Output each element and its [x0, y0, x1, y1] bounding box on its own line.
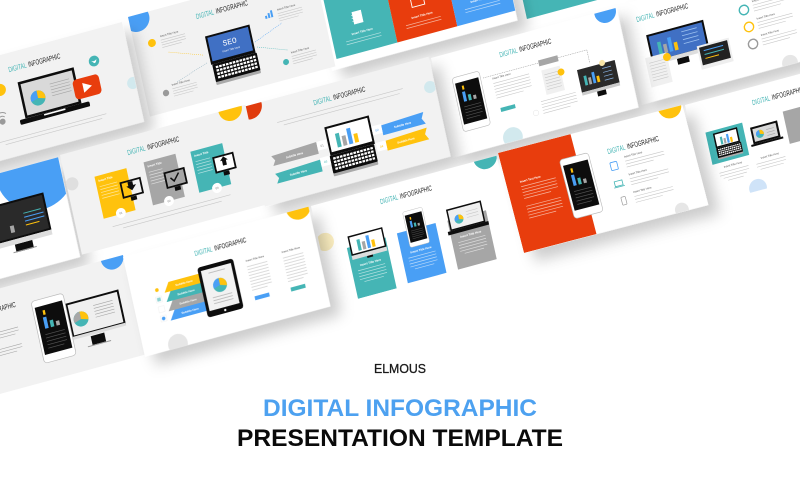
- laptop with SEO screen: [205, 24, 261, 85]
- list item gray: Insert Title Here: [760, 28, 780, 37]
- caption 2: Insert Title Here: [760, 151, 780, 160]
- callout bottom right: Insert Title Here: [290, 46, 310, 55]
- decoration: pale yellow circle: [314, 231, 336, 253]
- callout bottom: Insert Title Here: [171, 78, 191, 87]
- title: [196, 0, 248, 19]
- decoration: pale teal circle: [423, 80, 437, 94]
- decoration: pale teal circle: [503, 127, 523, 144]
- monitor: [577, 60, 620, 96]
- title: [312, 84, 367, 107]
- slide: monitor with checklist: [620, 0, 800, 111]
- slide: laptop with ribbons: [234, 45, 451, 208]
- icon: video play: [72, 74, 102, 100]
- text block lower: [531, 92, 578, 116]
- icon: wifi: [0, 112, 6, 125]
- ribbon: blue: [371, 112, 426, 138]
- panel: blue column: [438, 0, 515, 26]
- icon: yellow circle: [0, 84, 6, 96]
- text block: [492, 73, 532, 112]
- panel: blue column: Insert Title Here: [410, 245, 432, 254]
- decoration: yellow circle: [283, 192, 313, 223]
- ribbon stack: Subtitle Here: [175, 279, 193, 287]
- paragraph: [113, 195, 231, 231]
- slide: three colour columns: [310, 0, 517, 71]
- brand name: ELMOUS: [374, 362, 426, 376]
- callout bottom: [162, 80, 198, 96]
- list item teal: [738, 0, 784, 16]
- text column 1: Insert Title Here: [245, 254, 265, 263]
- callout top right: Insert Title Here: [276, 3, 296, 12]
- slide: teal panel top right: [500, 0, 708, 31]
- decoration: yellow circle: [655, 92, 684, 121]
- monitor with pie: [65, 289, 129, 351]
- decoration: gray circle: [782, 55, 798, 66]
- panel: teal laptop: [705, 123, 749, 165]
- title: INFOGRAPHIC: [518, 36, 552, 54]
- slide: SEO laptop: [121, 0, 335, 118]
- text column 2: [281, 245, 311, 292]
- title: [193, 235, 247, 258]
- text block: [0, 327, 23, 361]
- ribbon: teal: Subtitle Here: [289, 168, 308, 177]
- ribbon stack: [163, 273, 208, 321]
- tablet: [197, 258, 244, 318]
- decoration: pale teal circle: [127, 77, 136, 89]
- icon: phone: [559, 153, 603, 219]
- ribbon: gray: Subtitle Here: [285, 151, 304, 159]
- paragraph: [277, 89, 404, 126]
- heading line 2: PRESENTATION TEMPLATE: [237, 425, 563, 452]
- text block: Insert Title Here: [492, 72, 511, 81]
- slide: orange panel with phone: [494, 91, 710, 258]
- slide: three device columns: [305, 142, 519, 306]
- monitor: [0, 192, 54, 259]
- title: DIGITAL: [126, 144, 146, 157]
- ribbon: gray: [271, 139, 328, 166]
- title: DIGITAL: [193, 244, 213, 258]
- laptop with SEO screen: SEO: [222, 36, 238, 49]
- header bar and document: [538, 55, 565, 95]
- panel: teal column: Insert Title Here: [360, 257, 382, 267]
- title: DIGITAL: [606, 143, 626, 156]
- slide: blue shape and monitor: [0, 120, 94, 307]
- document: [645, 52, 672, 88]
- panel: gray column: Insert Title Here: [460, 229, 482, 239]
- list item: tablet: Insert Title Here: [624, 150, 643, 159]
- title: DIGITAL: [379, 193, 399, 206]
- small laptop: [697, 38, 734, 70]
- panel: orange column: Insert Title Here: [411, 10, 433, 20]
- orange panel text: [519, 171, 564, 218]
- decoration: gray circle: [673, 201, 690, 218]
- title: DIGITAL: [635, 10, 655, 24]
- ribbon: yellow: [375, 128, 429, 153]
- list item gray: [748, 30, 797, 50]
- slide: phone and monitor with pie: [0, 244, 145, 405]
- panel: gray: [144, 152, 191, 210]
- title: [499, 38, 552, 58]
- icon: phone: [452, 71, 491, 132]
- decoration: pale blue circle: [747, 177, 769, 199]
- panel: blue column: [397, 223, 446, 283]
- title: INFOGRAPHIC: [146, 134, 180, 152]
- list item: phone: Insert Title Here: [633, 185, 652, 194]
- panel: yellow: 01: [119, 211, 123, 215]
- list item yellow: [744, 13, 793, 32]
- ribbon stack: Subtitle Here: [177, 288, 195, 296]
- paragraph: [0, 114, 107, 146]
- decoration: gray circle: [166, 332, 190, 356]
- heading line 1: DIGITAL INFOGRAPHIC: [263, 395, 537, 422]
- decoration: blue circle: [98, 244, 126, 272]
- title: [751, 84, 800, 107]
- panel: gray: [783, 102, 800, 144]
- decoration: yellow circle: [216, 94, 244, 124]
- caption 1: Insert Title Here: [723, 160, 743, 169]
- ribbon: teal: 03: [324, 159, 328, 164]
- text column 2: Insert Title Here: [281, 245, 301, 254]
- ribbon: yellow: 04: [380, 144, 384, 149]
- callout top right: [265, 4, 303, 22]
- decoration: teal circle: [471, 142, 499, 172]
- callout bottom right: [283, 47, 317, 66]
- list item: phone: [620, 180, 674, 206]
- device: laptop with pie: [443, 200, 489, 235]
- icon: twitter circle: [88, 56, 100, 66]
- flow connector: [483, 50, 590, 78]
- decoration: gray circle: [64, 176, 80, 192]
- ribbon: gray: 01: [320, 143, 324, 148]
- callout left: [148, 31, 186, 48]
- monitor: [646, 20, 708, 65]
- title: INFOGRAPHIC: [399, 183, 433, 201]
- list item: laptop: [611, 162, 670, 189]
- panel: yellow: Insert Title: [98, 175, 113, 183]
- title: [126, 134, 180, 157]
- laptop: [18, 67, 90, 125]
- slide: laptop and video: [0, 21, 147, 172]
- title: [606, 134, 660, 156]
- slide: tablet with ribbons: [120, 192, 334, 363]
- decoration: red circle: [246, 102, 262, 120]
- ribbon: blue: 02: [375, 128, 379, 133]
- panel: teal: 03: [215, 186, 219, 190]
- panel: teal column: [317, 0, 397, 59]
- icon: phone: [31, 293, 76, 364]
- title: DIGITAL: [195, 7, 215, 21]
- title: [379, 183, 433, 206]
- slide: phone to monitor flow: [429, 0, 640, 164]
- title: DIGITAL: [312, 94, 332, 107]
- panel: yellow: [94, 165, 147, 223]
- title: DIGITAL: [751, 94, 771, 107]
- list item: tablet: [609, 145, 665, 171]
- ribbon icons: [154, 287, 167, 322]
- ribbon stack: Subtitle Here: [181, 306, 200, 315]
- decoration: blue circle: [0, 120, 82, 220]
- list item yellow: Insert Title Here: [756, 12, 776, 21]
- slide: three columns with monitors: [56, 93, 267, 255]
- panel: gray column: [447, 210, 497, 270]
- card: gray laptop with pie: [747, 120, 783, 147]
- title: INFOGRAPHIC: [213, 235, 247, 253]
- title: DIGITAL: [498, 46, 518, 59]
- ribbon: teal: [274, 156, 332, 184]
- slide: laptops row, right: [685, 55, 800, 211]
- list item: laptop: Insert Title Here: [628, 168, 648, 176]
- panel: teal: [190, 141, 240, 198]
- device: phone: [402, 207, 430, 248]
- laptop with chart: [323, 115, 379, 177]
- panel: teal: Insert Title: [194, 150, 209, 158]
- device: monitor with bars: [347, 227, 388, 262]
- panel: gray: Insert Title: [147, 161, 162, 168]
- orange panel text: Insert Text Here: [519, 174, 541, 184]
- title: [636, 3, 688, 22]
- laptop with SEO screen: Insert Title Here: [222, 45, 241, 53]
- callout left: Insert Title Here: [159, 29, 179, 38]
- panel: orange column: [378, 0, 457, 43]
- panel: teal column: Insert Title Here: [351, 26, 374, 36]
- panel: orange: [498, 134, 596, 253]
- panel: teal column: [347, 238, 397, 299]
- ribbon stack: Subtitle Here: [179, 297, 197, 306]
- ribbon: yellow: Subtitle Here: [397, 136, 415, 145]
- title: DIGITAL: [7, 61, 27, 74]
- text column 1: [245, 254, 275, 301]
- decoration: blue circle: [594, 8, 616, 23]
- dashed connectors: [168, 21, 288, 83]
- ribbon: blue: Subtitle Here: [393, 120, 412, 129]
- panel: gray: 02: [167, 199, 171, 203]
- title: INFOGRAPHIC: [27, 51, 61, 69]
- title: [8, 54, 60, 72]
- title: INFOGRAPHIC: [332, 84, 367, 102]
- title: INFOGRAPHIC: [626, 134, 660, 151]
- decoration: blue circle: [128, 12, 150, 32]
